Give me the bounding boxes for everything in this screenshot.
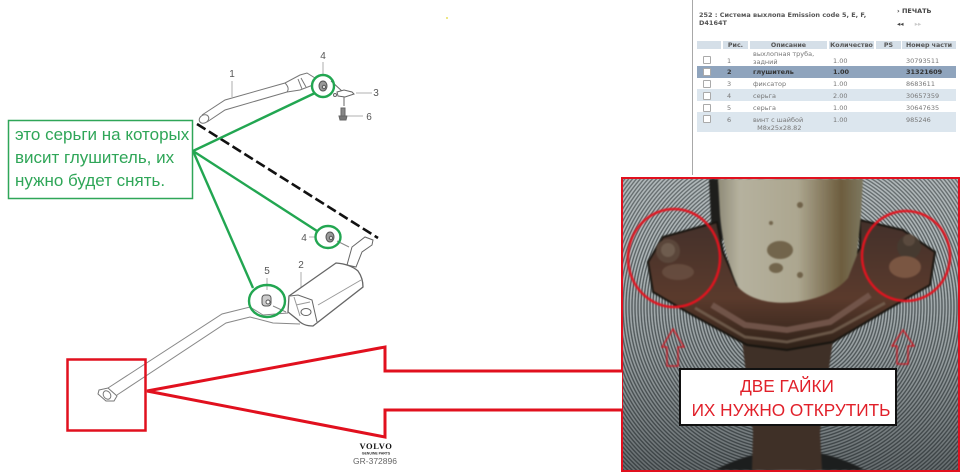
- row 4: серьга: [753, 92, 776, 100]
- row 6: 1.00: [833, 116, 847, 124]
- part 2: muffler and rear pipe: [108, 237, 373, 395]
- pipe rust spots: [767, 202, 803, 278]
- row 3: фиксатор: [753, 80, 786, 88]
- row 2 highlighted: глушитель: [753, 68, 794, 76]
- table header: [697, 41, 956, 49]
- volvo logo: [353, 441, 397, 466]
- clamp part 4 upper: [319, 81, 327, 91]
- dark left slit: [709, 179, 723, 240]
- row 6: 6: [727, 116, 731, 124]
- right bolt: [889, 234, 921, 278]
- part number labels: 4: [301, 233, 307, 244]
- row 4: 2.00: [833, 92, 847, 100]
- row 2 highlighted: 1.00: [833, 68, 849, 76]
- row 1: выхлопная труба,: [753, 50, 814, 58]
- row 3: 3: [727, 80, 731, 88]
- volvo logo: VOLVO: [359, 441, 393, 451]
- row 5: [727, 104, 939, 112]
- part number labels: 1: [229, 69, 235, 80]
- volvo logo: GENUINE PARTS: [362, 452, 391, 456]
- clamp part 5: [262, 295, 286, 312]
- row 2 highlighted: 31321609: [906, 68, 942, 76]
- panel title: D4164T: [699, 19, 727, 27]
- flange: [648, 220, 935, 350]
- red square around pipe end: [68, 360, 146, 430]
- red circles on nuts: [628, 209, 950, 307]
- small red arrows: [662, 329, 914, 366]
- panel title: [699, 11, 866, 27]
- table header: Номер части: [906, 42, 952, 49]
- yellow dot: [446, 17, 448, 19]
- row 3: [727, 80, 935, 88]
- photo caption box: [679, 368, 897, 426]
- part number labels: 6: [366, 112, 372, 123]
- green callout lines and circles: [193, 75, 340, 317]
- flange at pipe end: [98, 388, 117, 401]
- green callout box: висит глушитель, их: [15, 148, 175, 167]
- photo red frame: [621, 177, 960, 472]
- row 1: [727, 50, 939, 66]
- row 5: 30647635: [906, 104, 939, 112]
- row 1: 1.00: [833, 57, 847, 65]
- row 3: 1.00: [833, 80, 847, 88]
- row 1: задний: [753, 58, 778, 66]
- row checkboxes: [703, 56, 711, 123]
- row 4: 4: [727, 92, 731, 100]
- panel title: 252 : Система выхлопа Emission code 5, E, F,: [699, 11, 866, 19]
- photo caption box: ИХ НУЖНО ОТКРУТИТЬ: [692, 400, 890, 420]
- part number labels: [229, 51, 379, 277]
- photo panel: rusty flange with two nuts: [621, 177, 960, 472]
- lower pipe: [742, 340, 833, 470]
- dashed separation line: [197, 124, 378, 238]
- part 1: front exhaust pipe: [198, 73, 315, 125]
- part number labels: 5: [264, 266, 270, 277]
- row 6: винт с шайбой: [753, 116, 803, 124]
- table header: Рис.: [728, 42, 743, 49]
- table header: Описание: [771, 42, 806, 49]
- table header: Количество: [830, 42, 873, 49]
- row 2 highlighted: 2: [727, 68, 732, 76]
- table header: PS: [884, 42, 893, 49]
- row 5: серьга: [753, 104, 776, 112]
- upper pipe: [718, 179, 863, 303]
- clamp part 4 lower: [326, 232, 349, 247]
- row 5: 5: [727, 104, 731, 112]
- part 3 and 6: bracket and bolt: [331, 81, 354, 120]
- row 1: 1: [727, 57, 731, 65]
- flange highlight: [695, 303, 885, 342]
- row 6: M8x25x28.82: [757, 124, 801, 132]
- row 6: 985246: [906, 116, 931, 124]
- row 6: [697, 112, 956, 132]
- row 4: 30657359: [906, 92, 939, 100]
- dark bottom opening: [715, 450, 865, 470]
- green callout box: нужно будет снять.: [15, 171, 165, 190]
- part number labels: 2: [298, 260, 304, 271]
- navigation arrows: ◂◂ ▸▸: [897, 20, 921, 28]
- photo drawing: [626, 179, 952, 470]
- left bolt: [656, 239, 694, 280]
- row 5: 1.00: [833, 104, 847, 112]
- row 4: [697, 89, 956, 101]
- row 2 highlighted: [697, 66, 956, 78]
- big red arrow: [146, 345, 622, 439]
- print link: › ПЕЧАТЬ: [897, 7, 932, 15]
- photo caption box: ДВЕ ГАЙКИ: [740, 376, 834, 396]
- green callout box: это серьги на которых: [15, 125, 190, 144]
- row 3: 8683611: [906, 80, 935, 88]
- label leader lines: [232, 62, 372, 290]
- parts table panel: [692, 0, 960, 175]
- part number labels: 4: [320, 51, 326, 62]
- row 1: 30793511: [906, 57, 939, 65]
- volvo logo: GR-372896: [353, 456, 397, 466]
- green callout box: [8, 120, 194, 198]
- part number labels: 3: [373, 88, 379, 99]
